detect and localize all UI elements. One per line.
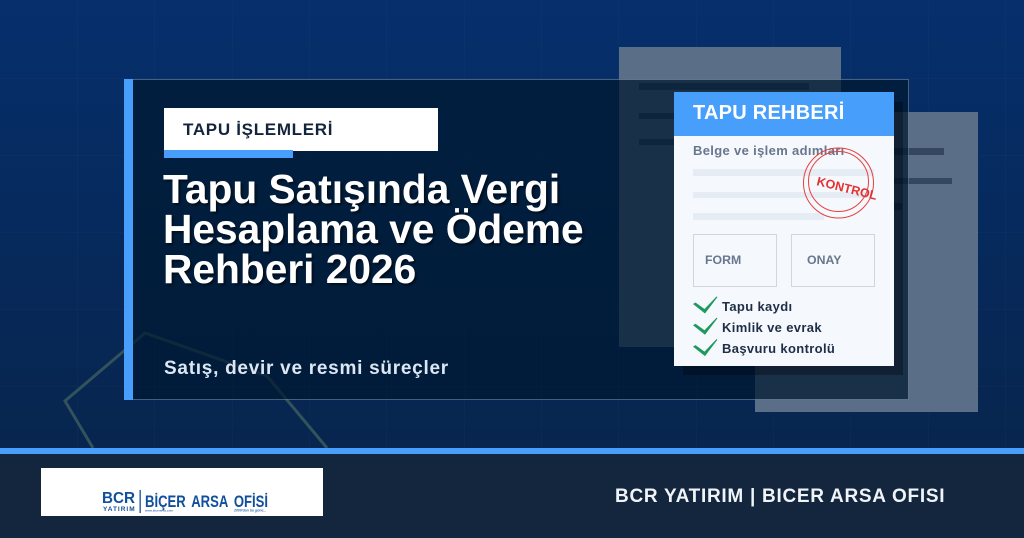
card subheading: Belge ve işlem adımları	[693, 143, 845, 158]
stamp: KONTROL	[815, 174, 879, 203]
title: Tapu Satışında Vergi	[163, 166, 560, 212]
logo	[41, 468, 323, 516]
category tag: TAPU İŞLEMLERİ	[183, 120, 333, 139]
checklist	[693, 296, 835, 356]
subtitle: Satış, devir ve resmi süreçler	[164, 358, 449, 379]
title: Rehberi 2026	[165, 248, 418, 294]
card header	[674, 92, 894, 136]
title: Tapu Satışında Vergi	[165, 168, 562, 214]
card header: TAPU REHBERİ	[693, 101, 845, 124]
back document right	[755, 112, 978, 412]
stamp	[804, 148, 879, 218]
placeholder text lines	[693, 169, 874, 220]
title: Rehberi 2026	[163, 246, 416, 292]
title	[163, 166, 586, 294]
approval box: ONAY	[807, 253, 841, 267]
item: tapu kaydi: Tapu kaydı	[722, 299, 792, 314]
item: kimlik ve evrak: Kimlik ve evrak	[722, 320, 822, 335]
logo: www.bicerarsa.com	[144, 508, 173, 512]
guide card	[674, 92, 903, 375]
logo: 2006'dan bu güne...	[233, 508, 266, 512]
item: tapu kaydi	[693, 296, 792, 314]
item: kimlik ve evrak	[693, 318, 822, 335]
title: Hesaplama ve Ödeme	[163, 206, 584, 252]
logo: BCR	[102, 490, 135, 507]
main panel	[124, 79, 908, 400]
footer bar	[0, 448, 1024, 538]
decorative hexagon outline	[65, 333, 327, 448]
footer brand text: BCR YATIRIM | BICER ARSA OFISI	[615, 486, 945, 507]
title: Hesaplama ve Ödeme	[165, 208, 586, 254]
form box: FORM	[705, 253, 741, 267]
category tag	[164, 108, 438, 158]
logo: BİÇER ARSA OFİSİ	[145, 493, 268, 511]
back document left	[619, 47, 841, 347]
item: basvuru kontrolu: Başvuru kontrolü	[722, 341, 835, 356]
logo: YATIRIM	[103, 506, 136, 513]
approval box	[792, 234, 874, 286]
form box	[694, 234, 776, 286]
